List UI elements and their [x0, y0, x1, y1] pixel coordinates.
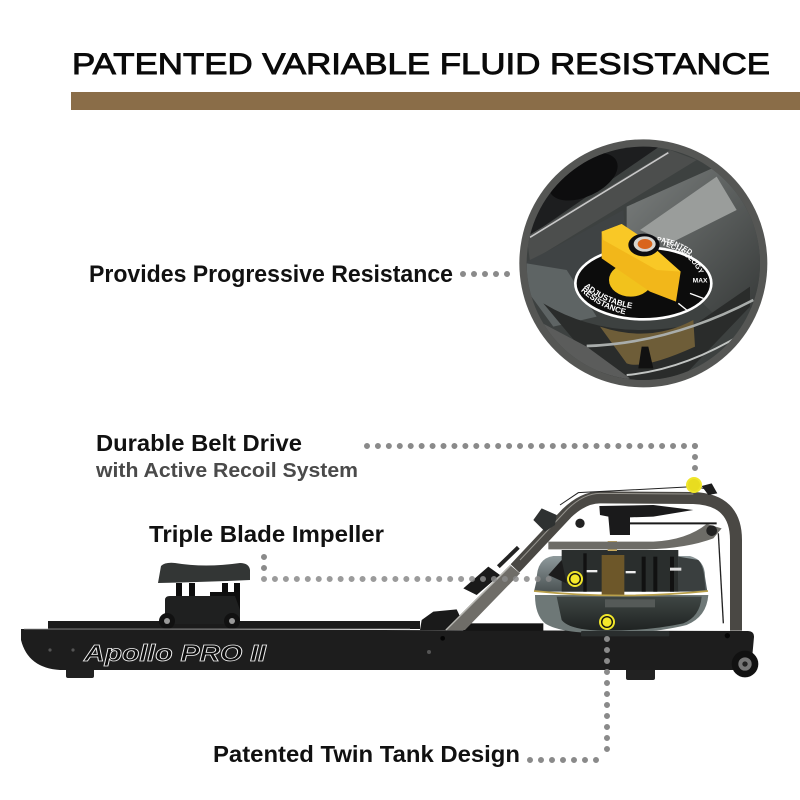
dial labels: ADJUSTABLE — [584, 284, 632, 308]
circular photo: resistance dial: MAX — [693, 278, 708, 285]
tubular frame — [515, 497, 736, 631]
callout: progressive resistance: Provides Progressive Resistance — [89, 261, 453, 288]
glass tank background — [626, 168, 760, 310]
circular photo: resistance dial — [519, 139, 768, 388]
slide rail — [48, 621, 420, 629]
rear wheel — [732, 651, 758, 677]
water tank upper — [534, 556, 707, 592]
water surface — [543, 287, 750, 383]
callout: belt drive: Durable Belt Drive — [96, 430, 302, 456]
seat — [158, 563, 250, 629]
diagonal frame band — [527, 150, 697, 262]
cross arm — [548, 524, 722, 549]
callout: impeller: Triple Blade Impeller — [149, 521, 384, 547]
dial — [574, 246, 713, 321]
brand logo: Apollo PRO II — [83, 640, 267, 666]
water tank lower — [535, 595, 708, 633]
callout: twin tank: Patented Twin Tank Design — [213, 741, 520, 767]
circular photo: resistance dial: TECHNOLOGY — [663, 240, 704, 272]
tank gold ring — [534, 591, 708, 595]
dark strip above frame — [463, 623, 543, 631]
belt — [560, 487, 713, 505]
title bar — [71, 92, 800, 110]
marker: impeller — [567, 571, 583, 587]
front section — [420, 483, 758, 677]
circular photo: resistance dial: PATENTED — [658, 236, 692, 254]
feet — [66, 668, 94, 678]
circular photo: resistance dial: RESISTANCE — [581, 287, 626, 314]
marker: tank — [599, 614, 615, 630]
frame base — [21, 629, 754, 670]
yellow knob — [609, 268, 648, 297]
rail incline — [445, 565, 520, 630]
marker: belt drive — [686, 477, 702, 493]
dotted leader: impeller — [264, 576, 552, 582]
flywheel housing — [599, 505, 693, 535]
tank tray — [581, 631, 669, 636]
callout: belt drive: with Active Recoil System — [95, 460, 358, 482]
footrest — [420, 609, 463, 630]
monitor bracket — [533, 508, 557, 532]
title: PATENTED VARIABLE FLUID RESISTANCE — [72, 48, 770, 81]
callout: belt drive — [95, 430, 695, 482]
impeller column — [602, 555, 624, 595]
rowing machine — [21, 483, 758, 680]
